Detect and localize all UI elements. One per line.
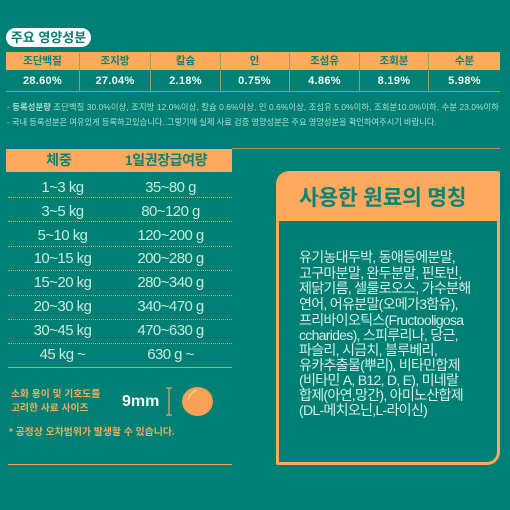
row amount: 35-80 g: 35~80 g [145,179,196,196]
ingredient list text: 연어, 어유분말(오메가3함유), [299,296,458,312]
ingredient list text [299,249,470,418]
nutrient header: crude fat: 조지방 [100,55,129,67]
row amount: 80-120 g: 80~120 g [141,203,200,220]
ingredient list text: 합제(아연,망간), 아미노산합제 [299,387,463,403]
row amount: 470-630 g: 470~630 g [137,322,204,339]
header: daily recommended amount: 1일권장급여량 [125,152,207,168]
heading: ingredient names: 사용한 원료의 명칭 [299,186,466,210]
row: 30-45 kg: 30~45 kg [34,322,91,339]
feeding table bottom line [8,367,232,368]
value: moisture: 5.98% [448,75,481,87]
kibble size text: 소화 용이 및 기호도를 [11,389,100,400]
row: 45 kg up: 45 kg ~ [40,346,85,363]
panel: feeding table [6,149,232,368]
divider line [8,464,232,465]
ingredient list text: 고구마분말, 완두분말, 핀토빈, [299,265,461,281]
ingredient list text: ccharides), 스피루리나, 당근, [299,327,458,343]
kibble size value: 9mm [122,393,159,410]
row amount: 630 g up: 630 g ~ [147,346,194,363]
ingredient list text: 파슬리, 시금치, 블루베리, [299,342,437,358]
kibble size text [11,388,100,414]
note: manufacturing tolerance: * 공정상 오차범위가 발생할 수 있습니다. [9,427,175,438]
ingredient list text: (DL-메치오닌,L-라이신) [299,402,427,418]
ingredient list text: 유기농대두박, 동애등에분말, [299,249,455,265]
value: phosphorus: 0.75% [238,75,271,87]
value: crude protein: 28.60% [23,75,62,87]
table header background [6,52,500,70]
value: crude fat: 27.04% [95,75,135,87]
value: crude ash: 8.19% [378,75,410,87]
value: calcium: 2.18% [169,75,202,87]
value: crude fibre: 4.86% [308,75,341,87]
row: 10-15 kg: 10~15 kg [34,250,91,267]
note: disclaimer: - 국내 등록성분은 여유있게 등록하고있습니다. 그렇기에 실제 사료 검증 영양성분은 주요 영양성분을 확인하여주시기 바랍니다. [7,117,437,127]
icon: size bracket [166,387,172,416]
row: 20-30 kg: 20~30 kg [34,298,91,315]
row amount: 200-280 g: 200~280 g [137,250,204,267]
table bottom line [6,91,500,92]
row: 15-20 kg: 15~20 kg [34,274,91,291]
nutrient header: crude protein: 조단백질 [23,55,62,67]
nutrient header: crude fibre: 조섬유 [310,55,339,67]
nutrient header: calcium: 칼슘 [176,55,195,67]
nutrient header: crude ash: 조회분 [380,55,408,67]
ingredient list text: 제닭기름, 셀룰로오스, 가수분해 [299,280,470,296]
panel: ingredient names [276,171,500,465]
row: 3-5 kg: 3~5 kg [41,203,84,220]
note: registered values: - 등록성분량 조단백질 30.0%이상, 조지방 12.0%이상, 칼슘 0.6%이상, 인 0.6%이상, 조섬유 5.0%이하, 조회분10.0%이하, 수분 23.0%이하 [7,102,499,112]
row amount: 340-470 g: 340~470 g [137,298,204,315]
ingredient list text: 프리바이오틱스(Fructooligosa [299,312,463,328]
nutrient header: phosphorus: 인 [250,55,259,67]
panel header band [279,174,497,221]
kibble size text: 고려한 사료 사이즈 [11,402,89,414]
icon: kibble [182,387,213,416]
header: body weight: 체중 [46,152,72,168]
row: 5-10 kg: 5~10 kg [38,227,87,244]
feeding table header background [6,149,232,172]
panel: nutrient table [6,52,500,92]
heading: main nutrients pill: 주요 영양성분 [11,30,86,45]
row amount: 280-340 g: 280~340 g [137,274,204,291]
nutrient header: moisture: 수분 [455,55,474,67]
ingredient list text: 유카추출물(뿌리), 비타민합제 [299,357,460,373]
row amount: 120-200 g: 120~200 g [137,227,204,244]
ingredient list text: (비타민 A, B12, D, E), 미네랄 [299,372,458,388]
row: 1-3 kg: 1~3 kg [41,179,84,196]
